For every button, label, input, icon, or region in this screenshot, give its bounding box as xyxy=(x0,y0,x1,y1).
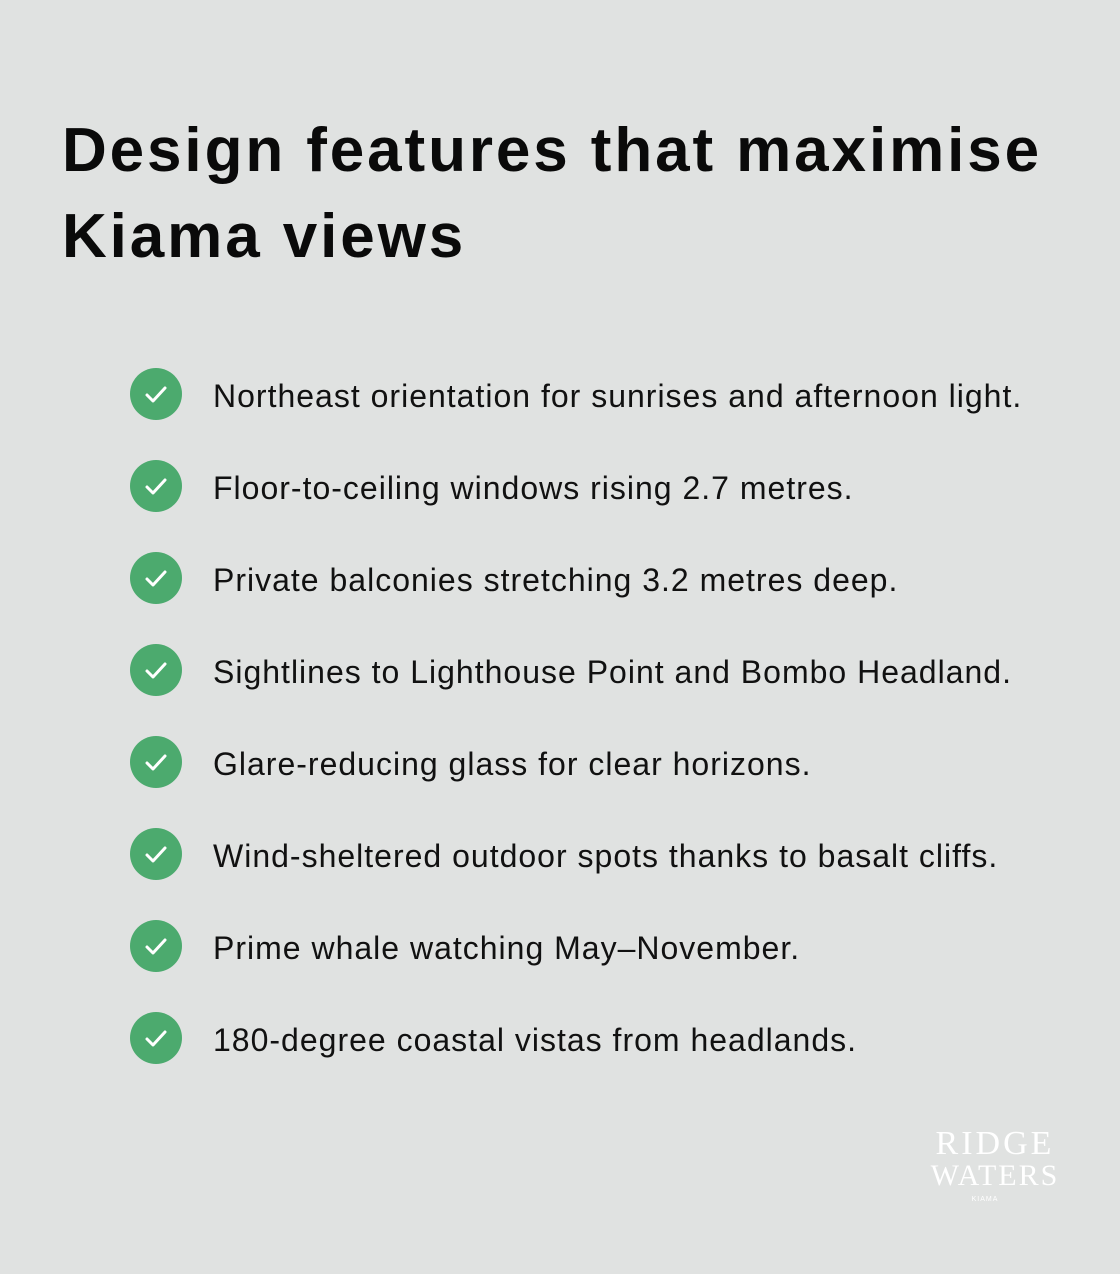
item 1: Northeast orientation for sunrises and afternoon light. xyxy=(213,378,1022,414)
logo: WATERS xyxy=(931,1159,1059,1192)
item 4 xyxy=(130,644,1012,696)
item 6 xyxy=(130,828,998,880)
checklist xyxy=(130,368,1022,1064)
item 8 xyxy=(130,1012,857,1064)
item 5 xyxy=(130,736,811,788)
item 6: Wind-sheltered outdoor spots thanks to basalt cliffs. xyxy=(213,838,998,874)
logo xyxy=(930,1125,1059,1203)
item 2 xyxy=(130,460,854,512)
title xyxy=(62,116,1042,271)
item 7 xyxy=(130,920,800,972)
item 3: Private balconies stretching 3.2 metres deep. xyxy=(213,562,898,598)
logo: RIDGE xyxy=(936,1125,1054,1162)
item 5: Glare-reducing glass for clear horizons. xyxy=(213,746,811,782)
title: Kiama views xyxy=(62,202,466,271)
title: Design features that maximise xyxy=(62,116,1042,185)
logo: KIAMA xyxy=(972,1196,998,1203)
item 7: Prime whale watching May–November. xyxy=(213,930,800,966)
item 4: Sightlines to Lighthouse Point and Bombo Headland. xyxy=(213,654,1012,690)
item 3 xyxy=(130,552,898,604)
item 8: 180-degree coastal vistas from headlands. xyxy=(213,1022,857,1058)
item 2: Floor-to-ceiling windows rising 2.7 metres. xyxy=(213,470,854,506)
item 1 xyxy=(130,368,1022,420)
